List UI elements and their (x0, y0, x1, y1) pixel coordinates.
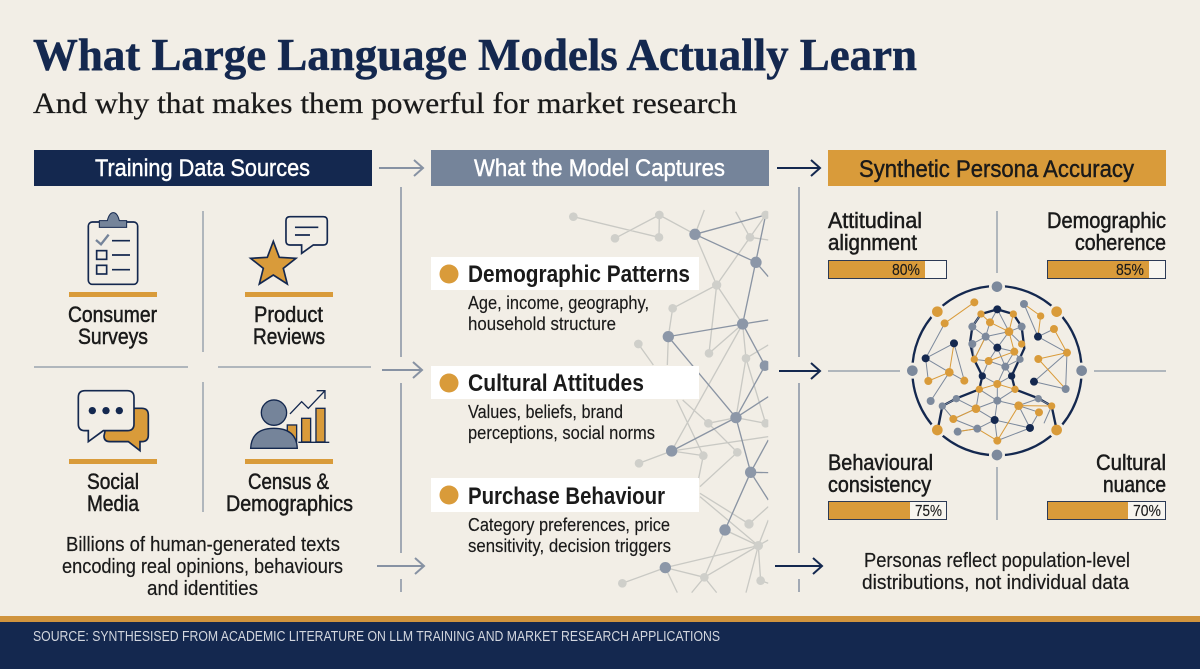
heading bar: training data sources: Training Data Sources (95, 155, 310, 182)
text block: billions of texts: encoding real opinions, behaviours (62, 556, 343, 578)
connectors: column flow lines and arrows (377, 160, 822, 592)
metric: cultural nuance 70%: nuance (1103, 472, 1166, 497)
metric: cultural nuance 70%: Cultural (1096, 450, 1166, 475)
text block: personas reflect distributions: Personas reflect population-level (864, 550, 1130, 572)
footer band (0, 616, 1200, 669)
label: product reviews: Reviews (253, 324, 325, 349)
metric: demographic coherence 85% (1047, 208, 1166, 279)
title: What Large Language Models Actually Learn (33, 30, 917, 80)
metric: behavioural consistency 75%: Behavioural (828, 450, 933, 475)
item: demographic patterns: Demographic Patterns (468, 261, 690, 288)
text block: personas reflect distributions (862, 550, 1130, 594)
label: consumer surveys: Surveys (78, 324, 148, 349)
item: demographic patterns: Age, income, geography, (468, 293, 649, 313)
item: cultural attitudes: Cultural Attitudes (468, 370, 644, 397)
item: purchase behaviour: Purchase Behaviour (468, 483, 665, 510)
metric: demographic coherence 85%: Demographic (1047, 208, 1166, 233)
text block: billions of texts (62, 534, 343, 600)
label: consumer surveys: Consumer (68, 302, 157, 327)
text block: personas reflect distributions: distributions, not individual data (862, 572, 1130, 594)
metric: cultural nuance 70%: 70% (1133, 503, 1161, 520)
metric: behavioural consistency 75%: 75% (915, 503, 942, 520)
source line: SOURCE: SYNTHESISED FROM ACADEMIC LITERATURE ON LLM TRAINING AND MARKET RESEARCH APPLICATIONS (33, 629, 720, 645)
label: social media: Media (87, 491, 140, 516)
metric: demographic coherence 85%: 85% (1116, 262, 1144, 279)
item: purchase behaviour (431, 478, 699, 556)
icon: star and speech bubble (251, 217, 327, 284)
metric: attitudinal alignment 80% (828, 208, 946, 279)
label: social media: Social (87, 469, 139, 494)
panel: what the model captures (431, 150, 770, 593)
item: purchase behaviour: sensitivity, decision triggers (468, 536, 671, 556)
label: product reviews (253, 302, 325, 349)
label: census and demographics (226, 469, 353, 516)
heading bar: what the model captures: What the Model Captures (474, 155, 725, 182)
item: purchase behaviour: Category preferences, price (468, 515, 670, 535)
label: census and demographics: Demographics (226, 491, 353, 516)
metric: attitudinal alignment 80%: 80% (892, 262, 920, 279)
text block: billions of texts: Billions of human-generated texts (66, 534, 340, 556)
item: demographic patterns: household structure (468, 314, 616, 334)
gold rules under icons (69, 292, 333, 464)
text block: billions of texts: and identities (147, 578, 258, 600)
metric: attitudinal alignment 80%: alignment (828, 230, 917, 255)
item: cultural attitudes: Values, beliefs, brand (468, 402, 623, 422)
heading bar: synthetic persona accuracy (828, 150, 1166, 186)
heading bar: training data sources (34, 150, 372, 186)
icon: chat bubbles (78, 391, 148, 451)
metric: behavioural consistency 75%: consistency (828, 472, 931, 497)
panel: training data sources (34, 150, 372, 600)
item: demographic patterns (431, 257, 699, 334)
label: social media (87, 469, 140, 516)
metric: cultural nuance 70% (1048, 450, 1166, 520)
quadrant dividers (828, 211, 1166, 520)
heading bar: synthetic persona accuracy: Synthetic Persona Accuracy (859, 156, 1134, 183)
panel: synthetic persona accuracy (828, 150, 1166, 594)
item: cultural attitudes: perceptions, social norms (468, 423, 655, 443)
icon: clipboard checklist (88, 213, 138, 284)
grid dividers (34, 211, 371, 512)
metric: attitudinal alignment 80%: Attitudinal (828, 208, 922, 233)
graphic: persona network in ring (904, 279, 1090, 463)
network graphic (569, 210, 770, 593)
label: census and demographics: Census & (248, 469, 329, 494)
label: product reviews: Product (254, 302, 323, 327)
metric: demographic coherence 85%: coherence (1075, 230, 1166, 255)
item: cultural attitudes (431, 366, 699, 443)
metric: behavioural consistency 75% (828, 450, 946, 520)
subtitle: And why that makes them powerful for market research (33, 87, 737, 120)
heading bar: what the model captures (431, 150, 769, 186)
label: consumer surveys (68, 302, 157, 349)
icon: person with rising bar chart (251, 391, 329, 448)
